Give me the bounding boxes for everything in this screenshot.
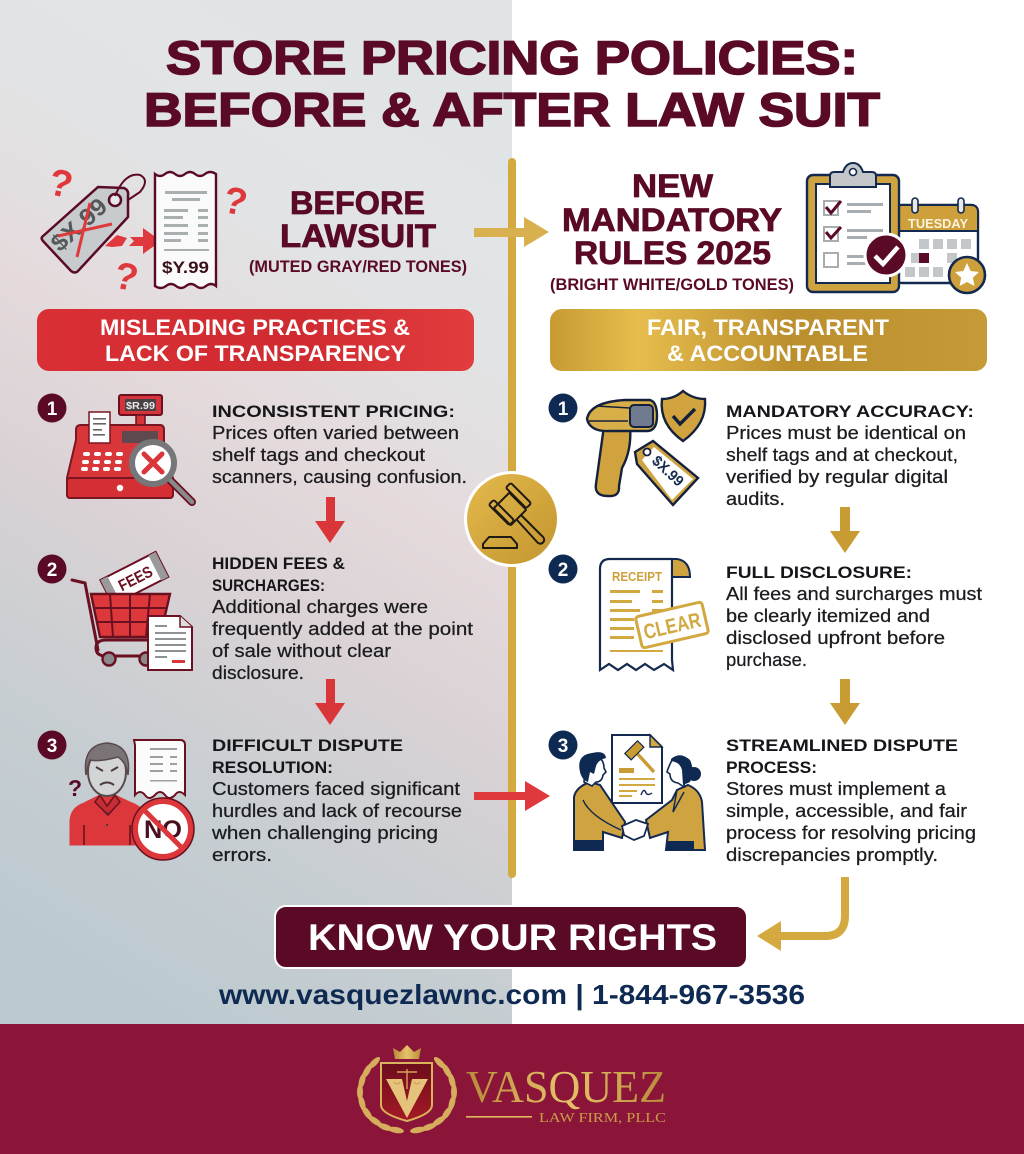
footer band: [0, 1024, 1024, 1154]
icon: price tag and receipt mismatch: ?: [110, 255, 142, 300]
text: mandatory accuracy: MANDATORY ACCURACY:: [726, 402, 974, 421]
text: full disclosure: purchase.: [726, 650, 807, 670]
text: hidden fees: SURCHARGES:: [212, 576, 325, 595]
badge: left 2: [38, 554, 66, 584]
text: streamlined dispute process: discrepancies promptly.: [726, 845, 938, 865]
icon: price tag and receipt mismatch: ?: [45, 161, 76, 207]
text: full disclosure: All fees and surcharges must: [726, 584, 982, 604]
text: streamlined dispute process: PROCESS:: [726, 758, 817, 777]
panel: before background: [0, 0, 512, 1024]
icon: checklist clipboard and calendar: [807, 163, 985, 293]
icon: frustrated customer refused: ?: [68, 775, 82, 801]
text: hidden fees: frequently added at the point: [212, 619, 473, 639]
center timeline line: [508, 158, 516, 878]
logo: Vasquez Law Firm: VASQUEZ: [466, 1062, 666, 1112]
text: mandatory accuracy: verified by regular digital: [726, 467, 948, 487]
icon: clear receipt: RECEIPT: [612, 570, 662, 584]
icon: price tag and receipt mismatch: $Y.99: [162, 258, 209, 277]
text: inconsistent pricing: scanners, causing confusion.: [212, 467, 467, 487]
badge: right 3: [548, 730, 578, 760]
title: STORE PRICING POLICIES:: [166, 31, 858, 84]
icon: clear receipt: [600, 559, 709, 670]
icon: handshake with legal document: [574, 735, 705, 850]
heading: before lawsuit: (MUTED GRAY/RED TONES): [249, 257, 467, 276]
banner: misleading practices: MISLEADING PRACTICES &: [100, 315, 410, 340]
text: streamlined dispute process: STREAMLINED DISPUTE: [726, 736, 958, 755]
text: streamlined dispute process: simple, accessible, and fair: [726, 801, 967, 821]
badge: left 3: 3: [47, 736, 57, 757]
badge: left 3: [38, 730, 66, 760]
text: difficult dispute resolution: when challenging pricing: [211, 823, 438, 843]
icon: frustrated customer refused: [68, 740, 194, 860]
icon: price tag and receipt mismatch: ?: [219, 179, 251, 225]
heading: new mandatory rules: NEW: [632, 168, 713, 204]
text: hidden fees: HIDDEN FEES &: [212, 554, 345, 573]
text: difficult dispute resolution: RESOLUTION:: [212, 758, 333, 777]
icon: frustrated customer refused: NO: [144, 816, 182, 844]
heading: new mandatory rules: RULES 2025: [574, 235, 771, 271]
text: inconsistent pricing: [212, 402, 467, 487]
text: inconsistent pricing: INCONSISTENT PRICING:: [212, 402, 455, 421]
text: difficult dispute resolution: Customers faced significant: [212, 779, 460, 799]
text: streamlined dispute process: [726, 736, 976, 865]
button: know your rights: KNOW YOUR RIGHTS: [308, 917, 717, 958]
icon: price tag and receipt mismatch: $X.99: [46, 193, 113, 257]
text: full disclosure: [726, 563, 982, 670]
arrow: left step 1 to 2: [315, 497, 345, 543]
icon: barcode scanner shield and tag: [587, 391, 705, 505]
icon: checklist clipboard and calendar: TUESDAY: [908, 216, 968, 231]
arrow: connector to call to action: [757, 877, 845, 951]
arrow: dispute process link: [474, 781, 550, 811]
icon: gavel medallion: [464, 471, 560, 567]
text: full disclosure: disclosed upfront before: [726, 628, 945, 648]
heading: new mandatory rules: (BRIGHT WHITE/GOLD TONES): [550, 275, 794, 294]
heading: new mandatory rules: MANDATORY: [562, 202, 782, 238]
text: full disclosure: FULL DISCLOSURE:: [726, 563, 912, 582]
text: hidden fees: Additional charges were: [212, 597, 428, 617]
text: hidden fees: of sale without clear: [212, 641, 391, 661]
arrow: right step 2 to 3: [830, 679, 860, 725]
badge: left 1: [38, 394, 66, 422]
text: streamlined dispute process: process for resolving pricing: [726, 823, 976, 843]
heading: before lawsuit: BEFORE: [290, 185, 425, 221]
badge: left 2: 2: [47, 560, 57, 581]
icon: cash register with magnifier: [67, 395, 192, 502]
logo: Vasquez Law Firm: [357, 1045, 666, 1134]
banner: fair transparent accountable: FAIR, TRANSPARENT: [647, 315, 890, 340]
text: full disclosure: be clearly itemized and: [726, 606, 930, 626]
icon: cash register with magnifier: $R.99: [126, 401, 155, 412]
title: [144, 31, 880, 136]
text: mandatory accuracy: [726, 402, 974, 509]
badge: right 3: 3: [558, 736, 568, 757]
text: hidden fees: [212, 554, 473, 683]
arrow: before to after: [474, 217, 549, 247]
text: difficult dispute resolution: errors.: [212, 845, 272, 865]
icon: barcode scanner shield and tag: $X.99: [648, 452, 687, 490]
banner: fair transparent accountable: & ACCOUNTABLE: [667, 341, 868, 366]
icon: shopping cart with fees: [72, 552, 192, 670]
icon: shopping cart with fees: FEES: [116, 563, 156, 595]
banner: misleading practices: LACK OF TRANSPARENCY: [105, 341, 406, 366]
text: mandatory accuracy: audits.: [726, 489, 785, 509]
logo: Vasquez Law Firm: LAW FIRM, PLLC: [539, 1111, 666, 1126]
text: hidden fees: disclosure.: [212, 663, 304, 683]
icon: price tag and receipt mismatch: [42, 161, 251, 300]
title: BEFORE & AFTER LAW SUIT: [144, 83, 880, 136]
heading: before lawsuit: [249, 185, 467, 276]
heading: new mandatory rules: [550, 168, 794, 294]
heading: before lawsuit: LAWSUIT: [280, 218, 436, 254]
text: difficult dispute resolution: DIFFICULT DISPUTE: [212, 736, 403, 755]
badge: right 1: [548, 394, 578, 422]
text: difficult dispute resolution: [211, 736, 462, 865]
arrow: left step 2 to 3: [315, 679, 345, 725]
contact line: www.vasquezlawnc.com | 1-844-967-3536: [218, 979, 805, 1010]
badge: right 2: [548, 554, 578, 584]
button: know your rights: [275, 906, 747, 968]
banner: fair transparent accountable: [550, 309, 987, 371]
text: inconsistent pricing: Prices often varied between: [212, 423, 459, 443]
banner: misleading practices: [37, 309, 474, 371]
arrow: right step 1 to 2: [830, 507, 860, 553]
text: mandatory accuracy: shelf tags and at checkout,: [726, 445, 958, 465]
text: difficult dispute resolution: hurdles and lack of recourse: [212, 801, 462, 821]
badge: right 1: 1: [558, 399, 569, 420]
text: streamlined dispute process: Stores must implement a: [726, 779, 947, 799]
icon: clear receipt: CLEAR: [641, 609, 703, 644]
badge: right 2: 2: [558, 560, 568, 581]
text: inconsistent pricing: shelf tags and checkout: [212, 445, 425, 465]
badge: left 1: 1: [47, 399, 58, 420]
text: mandatory accuracy: Prices must be identical on: [726, 423, 966, 443]
panel: after background: [512, 0, 1024, 1024]
